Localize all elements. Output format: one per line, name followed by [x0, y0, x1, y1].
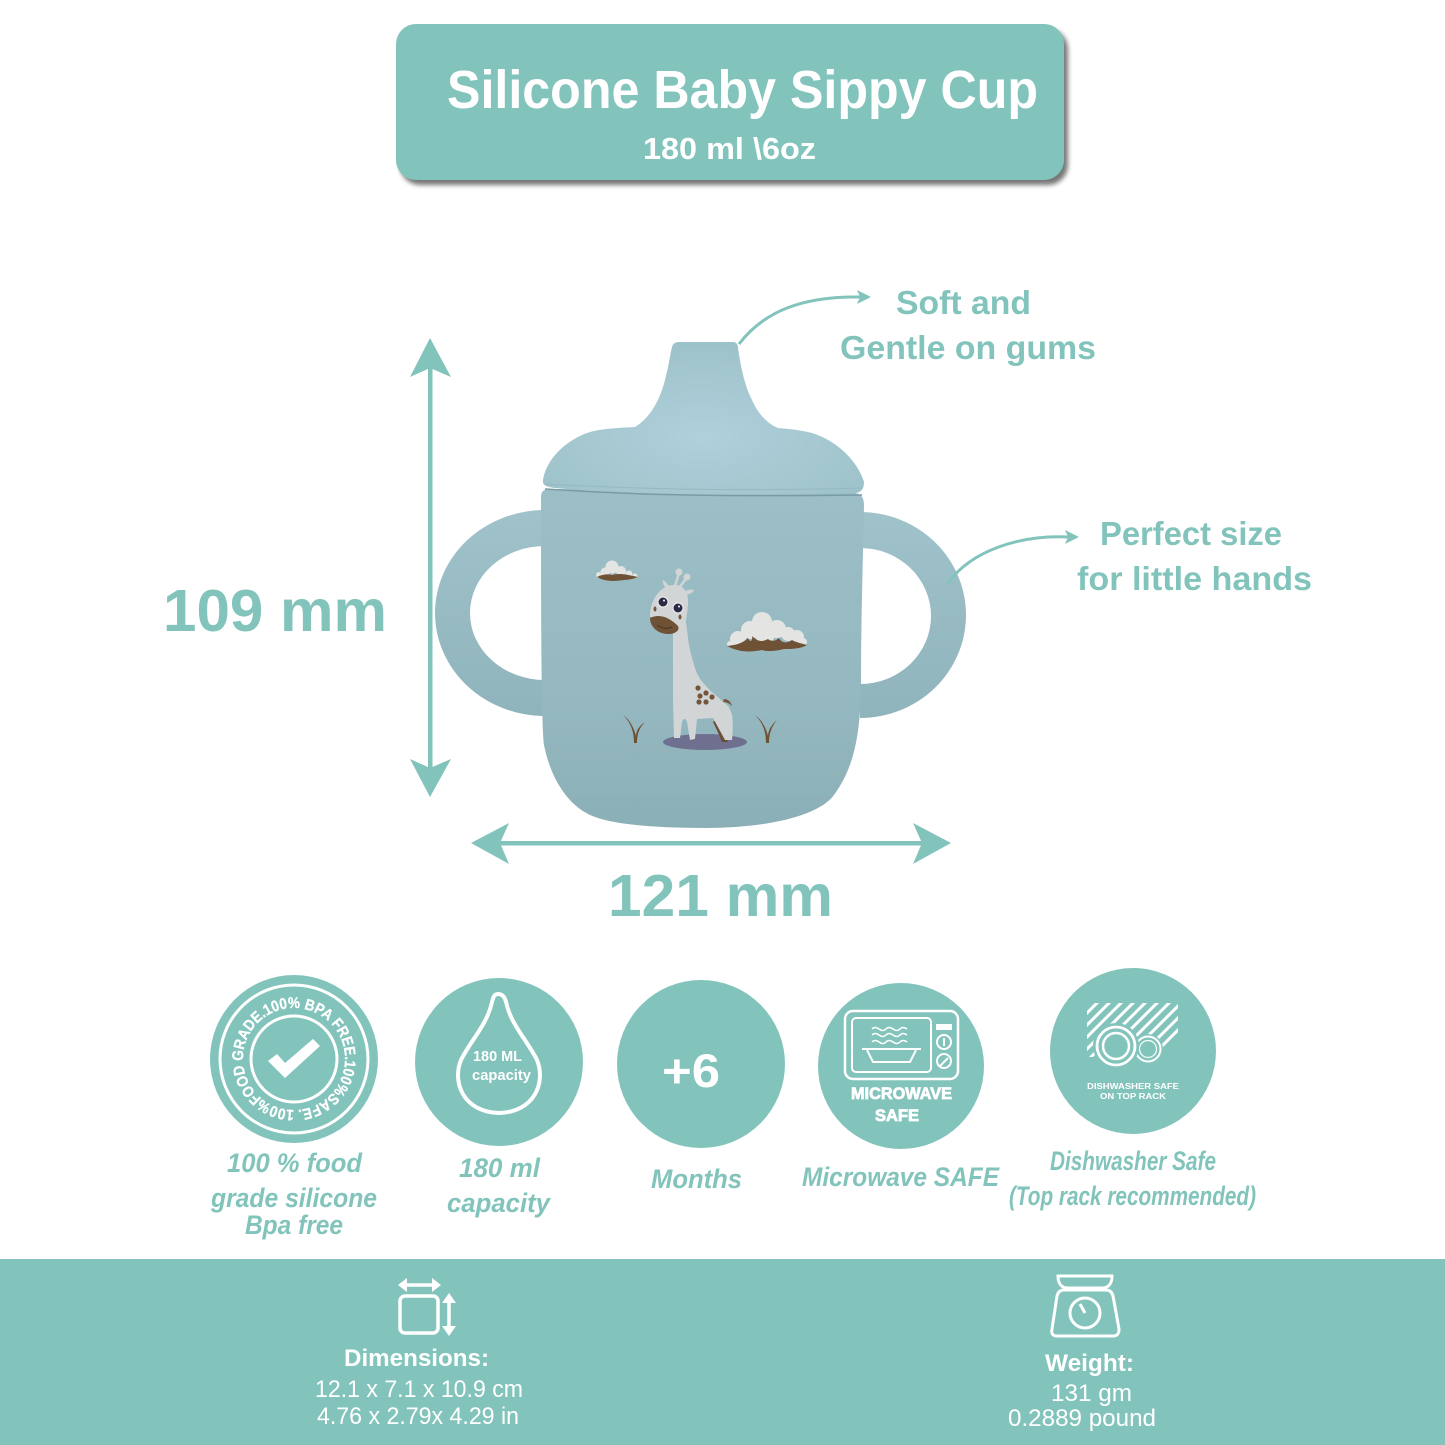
badge: 180 ml capacity — [415, 978, 583, 1146]
caption: capacity: capacity — [447, 1188, 551, 1218]
caption: capacity — [447, 1153, 551, 1218]
badge: food grade bpa free: 100%FOOD GRADE.100% BPA FREE.100%SAFE. — [232, 997, 356, 1121]
icon: weight scale — [1052, 1276, 1119, 1336]
badge: 180 ml capacity: capacity — [472, 1068, 531, 1084]
badge: 180 ml capacity: 180 ML — [473, 1049, 522, 1065]
title banner: Silicone Baby Sippy Cup — [447, 60, 1038, 120]
badge: dishwasher safe: ON TOP RACK — [1100, 1092, 1166, 1101]
caption: food grade — [210, 1148, 377, 1240]
text: dimensions: 12.1 x 7.1 x 10.9 cm — [315, 1376, 523, 1403]
caption: food grade: Bpa free — [245, 1210, 343, 1240]
icon: dimensions — [398, 1278, 456, 1336]
callout: soft and gentle — [840, 284, 1096, 366]
sippy cup photo — [435, 342, 966, 828]
callout arrow: handle — [948, 530, 1079, 583]
text: weight: Weight: — [1045, 1350, 1134, 1377]
badge: 6 months — [617, 980, 785, 1148]
badge: microwave safe: SAFE — [875, 1106, 919, 1125]
caption: dishwasher safe: Dishwasher Safe — [1050, 1146, 1216, 1176]
badge: food grade bpa free — [210, 975, 378, 1143]
title banner: 180 ml \6oz — [643, 131, 816, 166]
caption: food grade: grade silicone — [210, 1183, 377, 1213]
giraffe print — [623, 568, 777, 750]
arrow: height dimension — [410, 338, 451, 797]
caption: capacity: 180 ml — [459, 1153, 541, 1183]
callout: perfect size: for little hands — [1077, 560, 1312, 597]
caption: dishwasher safe: (Top rack recommended) — [1009, 1181, 1256, 1211]
lid — [543, 342, 864, 495]
badge: dishwasher safe — [1040, 968, 1220, 1134]
left handle — [435, 510, 545, 716]
text: dimensions — [315, 1345, 523, 1430]
callout: perfect size: Perfect size — [1100, 515, 1282, 552]
callout: soft and gentle: Gentle on gums — [840, 329, 1096, 366]
badge: 6 months: +6 — [662, 1044, 720, 1097]
badge: microwave safe — [818, 983, 984, 1149]
arrow: width dimension — [471, 823, 951, 864]
right handle — [860, 512, 966, 718]
text: dimensions: 4.76 x 2.79x 4.29 in — [317, 1403, 519, 1430]
text: weight — [1008, 1350, 1156, 1432]
text: dimensions: Dimensions: — [344, 1345, 489, 1372]
callout: soft and gentle: Soft and — [896, 284, 1031, 321]
text: weight: 131 gm — [1051, 1380, 1132, 1407]
badge: microwave safe: MICROWAVE — [851, 1084, 952, 1103]
cup body — [541, 489, 864, 828]
footer band — [0, 1259, 1445, 1445]
callout arrow: spout — [739, 290, 871, 344]
clouds print — [596, 560, 807, 651]
text: weight: 0.2889 pound — [1008, 1405, 1156, 1432]
badge: dishwasher safe: DISHWASHER SAFE — [1087, 1082, 1180, 1091]
caption: microwave safe: Microwave SAFE — [802, 1162, 1000, 1192]
label: height: 109 mm — [163, 578, 387, 644]
caption: food grade: 100 % food — [227, 1148, 363, 1178]
callout: perfect size — [1077, 515, 1312, 597]
title banner — [396, 24, 1068, 185]
label: width: 121 mm — [608, 863, 833, 929]
caption: dishwasher safe — [1009, 1146, 1256, 1211]
caption: months: Months — [651, 1164, 742, 1194]
